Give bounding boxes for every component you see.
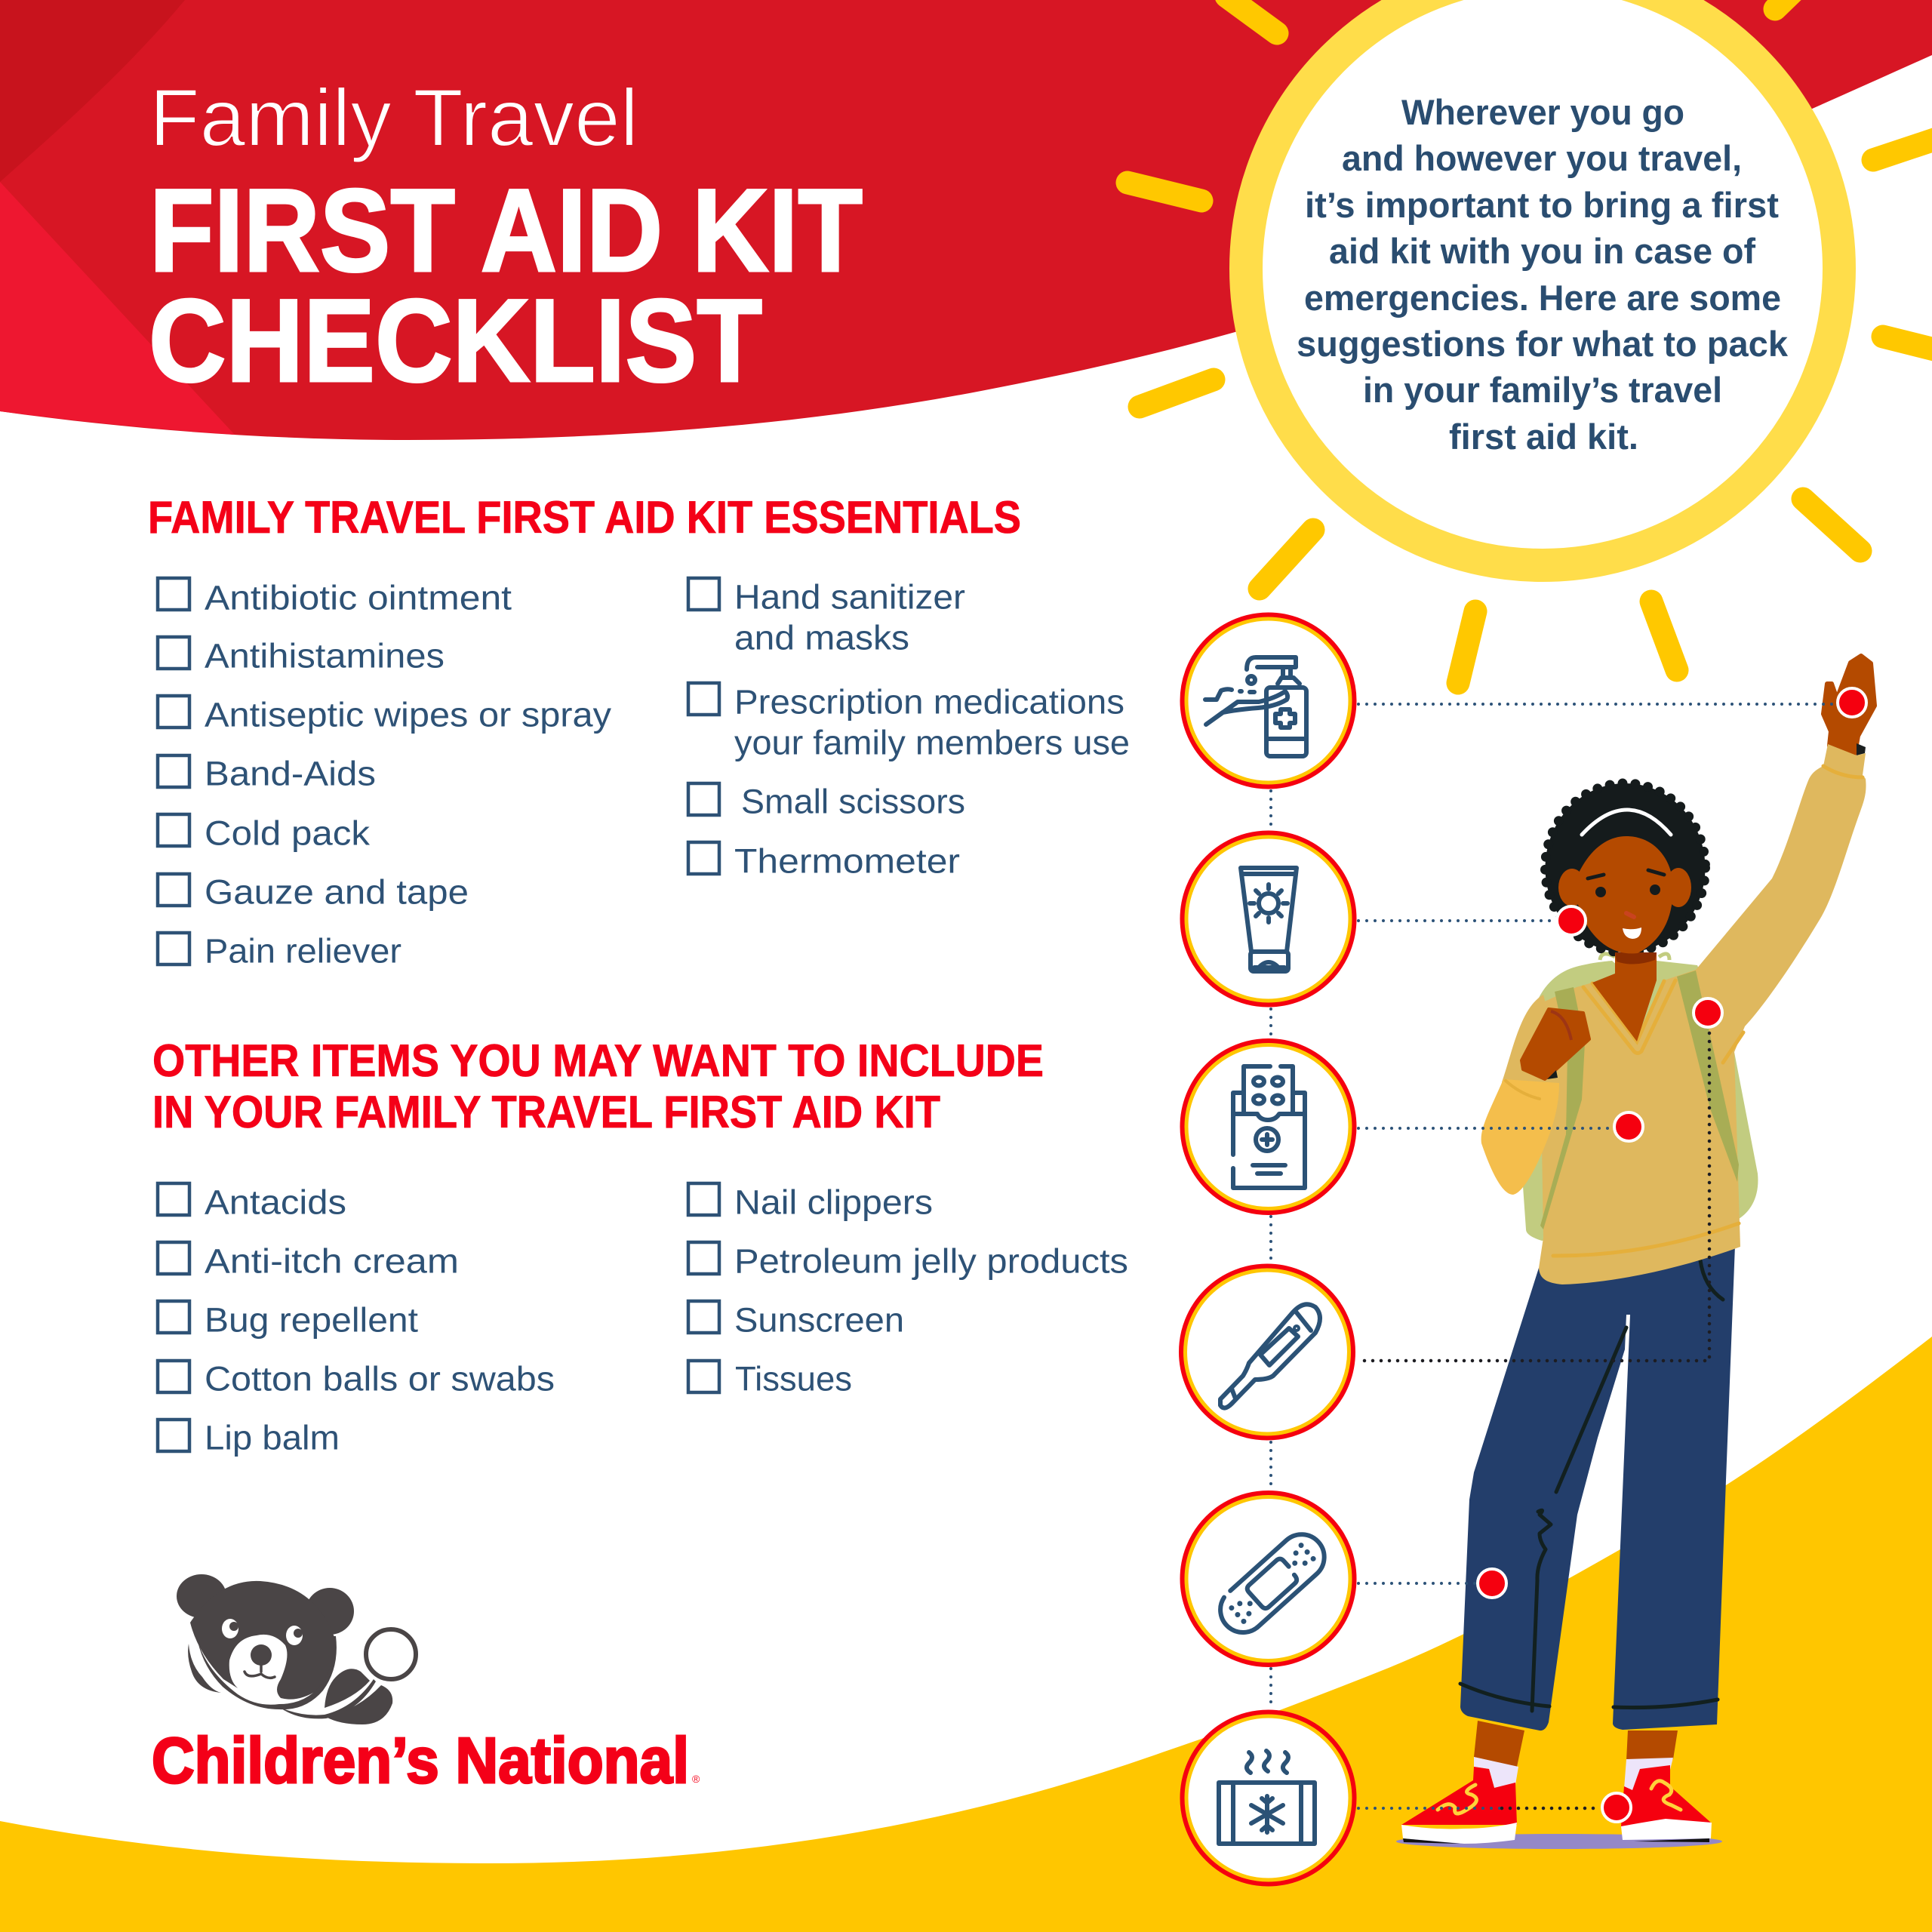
hair — [1546, 783, 1706, 952]
item: antacids: Antacids — [205, 1183, 346, 1221]
item: anti-itch cream: Anti-itch cream — [205, 1242, 459, 1280]
icon badge: sunscreen tube — [1182, 833, 1354, 1005]
sun circle with intro text — [1246, 0, 1839, 565]
sun circle with intro text: Wherever you go — [1401, 92, 1684, 132]
item: prescription medications: Prescription medications — [734, 682, 1124, 721]
item: prescription medications: your family members use — [734, 723, 1130, 762]
illustration: woman with backpack — [1396, 656, 1875, 1849]
sun circle with intro text: emergencies. Here are some — [1304, 278, 1781, 318]
body markers — [1478, 688, 1866, 1822]
icon badge: bandage — [1182, 1493, 1354, 1665]
title: CHECKLIST — [149, 275, 762, 407]
item: band-aids: Band-Aids — [205, 755, 376, 792]
item: hand sanitizer — [688, 578, 965, 657]
item: nail clippers: Nail clippers — [734, 1183, 933, 1221]
sun rays — [1128, 0, 1932, 683]
title — [149, 72, 863, 407]
sun circle with intro text: it’s important to bring a first — [1305, 185, 1779, 225]
item: antiseptic: Antiseptic wipes or spray — [205, 696, 612, 734]
icon badge: cold pack — [1182, 1712, 1354, 1884]
title: Family Travel — [149, 72, 638, 163]
heading: essentials: FAMILY TRAVEL FIRST AID KIT ESSENTIALS — [148, 492, 1021, 543]
marker: face — [1557, 906, 1586, 935]
item: antacids — [158, 1183, 346, 1221]
marker: ankle — [1602, 1793, 1631, 1822]
item: bug repellent: Bug repellent — [205, 1301, 419, 1339]
item: antibiotic ointment: Antibiotic ointment — [205, 578, 512, 617]
logo: Children's National — [152, 1574, 700, 1797]
sun circle with intro text: in your family’s travel — [1363, 370, 1722, 410]
right raised hand — [1823, 656, 1875, 753]
icon badge: medication packet — [1182, 1041, 1354, 1213]
backpack straps — [1540, 971, 1739, 1229]
wordmark: Children’s National — [152, 1725, 689, 1797]
icon: bear with stethoscope — [177, 1574, 416, 1724]
checklist: essentials right column — [688, 578, 1130, 880]
marker: shoulder — [1694, 998, 1722, 1027]
heading: other items: OTHER ITEMS YOU MAY WANT TO INCLUDE — [152, 1035, 1044, 1086]
item: antihistamines: Antihistamines — [205, 637, 445, 675]
item: cold pack: Cold pack — [205, 814, 371, 853]
item: gauze: Gauze and tape — [205, 872, 469, 912]
checklist: other items left column — [158, 1183, 555, 1457]
sun circle with intro text: first aid kit. — [1449, 417, 1638, 457]
sun circle with intro text: suggestions for what to pack — [1297, 324, 1789, 364]
ears — [1558, 869, 1586, 906]
checklist: essentials left column — [158, 578, 612, 971]
item: tissues: Tissues — [735, 1360, 852, 1398]
headband — [1582, 810, 1671, 835]
socks — [1474, 1757, 1673, 1792]
marker: chest — [1614, 1112, 1643, 1141]
item: hand sanitizer: and masks — [734, 619, 909, 657]
left hand — [1521, 1009, 1589, 1079]
heading: other items: IN YOUR FAMILY TRAVEL FIRST AID KIT — [152, 1087, 940, 1137]
checklist: other items right column — [688, 1183, 1128, 1398]
pants lines — [1460, 1260, 1723, 1711]
shoes — [1401, 1765, 1712, 1844]
heading: other items — [152, 1035, 1044, 1137]
sun circle with intro text: and however you travel, — [1342, 138, 1742, 178]
item: hand sanitizer: Hand sanitizer — [734, 578, 965, 616]
icon badge: hand sanitizer — [1182, 614, 1354, 786]
item: sunscreen: Sunscreen — [734, 1301, 904, 1339]
registered mark: ® — [692, 1773, 700, 1785]
eyes, brows, mouth — [1588, 870, 1664, 939]
red header banner — [0, 0, 1932, 440]
item: petroleum jelly: Petroleum jelly products — [734, 1242, 1128, 1280]
pants — [1460, 1245, 1735, 1730]
sweater torso and raised arm — [1539, 744, 1866, 1284]
yellow ground wave — [0, 1337, 1932, 1932]
icon badge: thermometer — [1181, 1266, 1353, 1438]
item: cotton balls: Cotton balls or swabs — [205, 1360, 555, 1398]
left arm sleeve — [1481, 995, 1559, 1195]
marker: hand — [1838, 688, 1866, 717]
item: pain reliever: Pain reliever — [205, 931, 401, 971]
dotted connector lines — [1271, 704, 1838, 1808]
shadow — [1396, 1834, 1722, 1849]
item: thermometer: Thermometer — [734, 842, 960, 880]
item: lip balm: Lip balm — [205, 1419, 340, 1457]
title: FIRST AID KIT — [149, 165, 863, 297]
sun circle with intro text: aid kit with you in case of — [1329, 231, 1755, 271]
neck and face — [1546, 783, 1706, 1041]
marker: knee — [1478, 1569, 1506, 1598]
item: small scissors: Small scissors — [741, 782, 965, 821]
backpack — [1523, 954, 1758, 1241]
item: prescription medications — [688, 682, 1130, 762]
legs — [1474, 1721, 1678, 1767]
sweater fold lines — [1553, 766, 1863, 1256]
